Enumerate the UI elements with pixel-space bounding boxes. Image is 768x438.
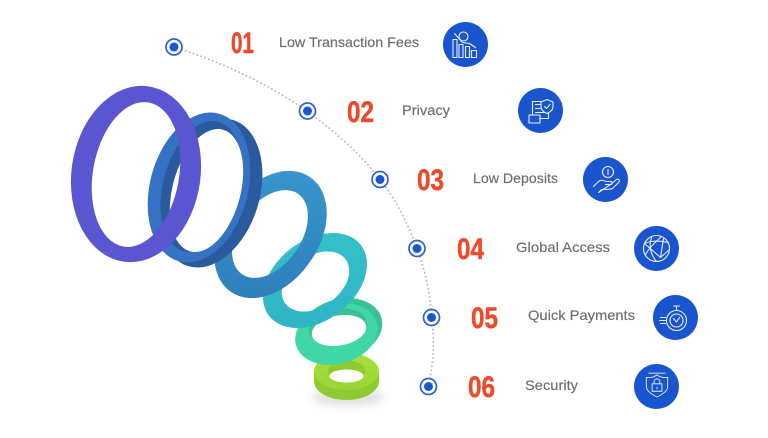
item 03: low deposits bbox=[372, 157, 628, 202]
ring 3: sky blue bbox=[214, 171, 327, 298]
node 06 bbox=[420, 378, 436, 394]
number 06: 06 bbox=[468, 371, 495, 404]
ring 2: blue bbox=[132, 101, 280, 280]
number 04: 04 bbox=[457, 233, 484, 266]
node 04 bbox=[409, 240, 425, 256]
node 03 bbox=[372, 172, 388, 188]
label 05: Quick Payments bbox=[528, 307, 635, 323]
ring 6: green bbox=[312, 353, 384, 405]
item 04: global access bbox=[409, 226, 679, 271]
node 01 bbox=[166, 39, 182, 55]
label 06: Security bbox=[525, 377, 578, 393]
icon: stopwatch bbox=[653, 295, 698, 340]
icon: shield with padlock bbox=[634, 364, 679, 409]
dotted arc connector bbox=[174, 47, 433, 386]
icon: coin over hand bbox=[583, 157, 628, 202]
item 05: quick payments bbox=[424, 295, 698, 340]
ring 4: teal bbox=[263, 233, 367, 328]
icon: shield and documents bbox=[518, 88, 563, 133]
node 02 bbox=[300, 103, 316, 119]
number 05: 05 bbox=[471, 302, 498, 335]
label 01: Low Transaction Fees bbox=[279, 34, 419, 50]
item 02: privacy bbox=[300, 88, 563, 133]
ring 5: mint bbox=[288, 289, 389, 374]
number 03: 03 bbox=[417, 164, 444, 197]
node 05 bbox=[424, 310, 440, 326]
ring 1: purple bbox=[71, 86, 201, 262]
item 01: low transaction fees bbox=[166, 22, 488, 67]
number 02: 02 bbox=[347, 96, 374, 129]
3D ring stack bbox=[71, 86, 389, 405]
label 02: Privacy bbox=[402, 102, 450, 118]
icon: globe network bbox=[634, 226, 679, 271]
item 06: security bbox=[420, 364, 679, 409]
icon: falling bars with coin bbox=[443, 22, 488, 67]
label 04: Global Access bbox=[516, 239, 610, 255]
label 03: Low Deposits bbox=[473, 170, 558, 186]
number 01: 01 bbox=[231, 27, 254, 60]
